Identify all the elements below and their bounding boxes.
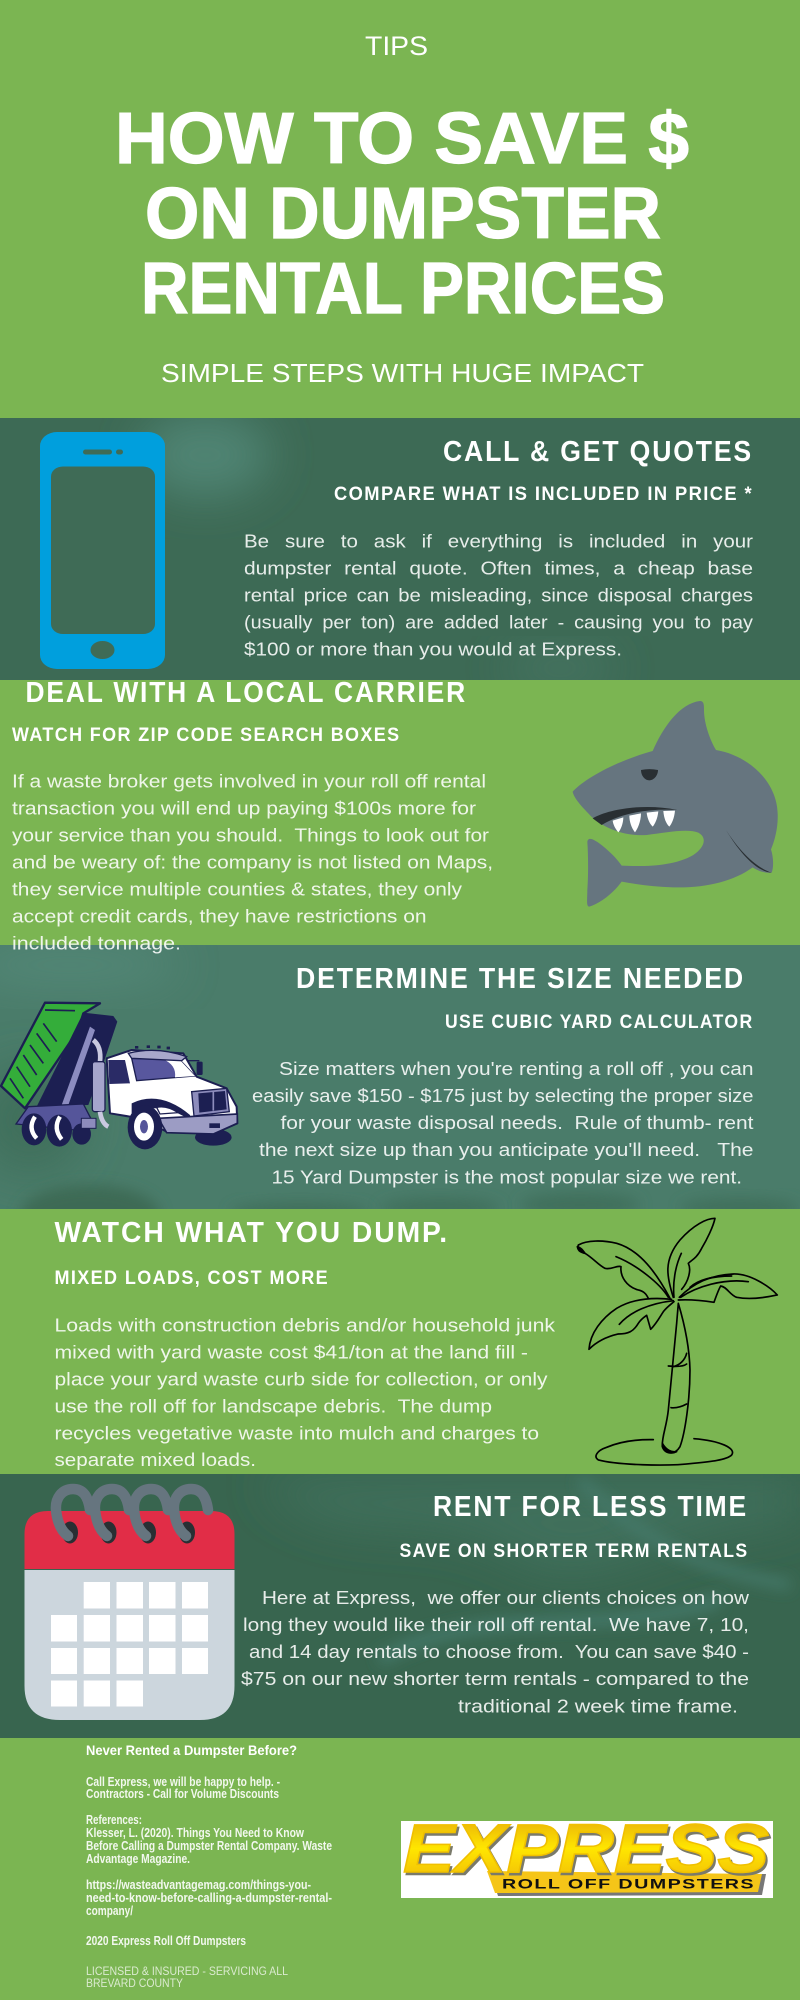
panel: call and get quotes — [0, 413, 800, 684]
heading: watch what you dump: WATCH WHAT YOU DUMP. — [54, 1217, 449, 1249]
references: https://wasteadvantagemag.com/things-you- — [86, 1878, 311, 1892]
subheading: cubic yard calculator: USE CUBIC YARD CALCULATOR — [445, 1011, 754, 1033]
license note — [86, 1966, 289, 1990]
title: ON DUMPSTER — [145, 174, 661, 254]
body text: rental length: $75 on our new shorter term rentals - compared to the — [241, 1669, 749, 1689]
icon: shark — [573, 701, 778, 907]
body text: mixed loads: mixed with yard waste cost $41/ton at the land fill - — [54, 1342, 528, 1362]
references — [86, 1813, 332, 1918]
panel: footer — [0, 1738, 800, 2000]
panel: watch what you dump — [0, 1209, 800, 1474]
tips label: TIPS — [365, 31, 428, 61]
body text: quotes — [244, 532, 753, 660]
icon: smartphone — [40, 432, 165, 669]
body text: mixed loads: separate mixed loads. — [54, 1450, 256, 1470]
body text: waste broker — [12, 772, 493, 954]
body text: mixed loads: use the roll off for landscape debris. The dump — [54, 1396, 492, 1416]
body text: rental length — [241, 1588, 750, 1716]
heading: determine the size: DETERMINE THE SIZE NEEDED — [296, 963, 745, 995]
body text: size: Size matters when you're renting a roll off , you can — [279, 1059, 754, 1079]
references: Before Calling a Dumpster Rental Company. Waste — [86, 1839, 332, 1853]
icon: roll off truck — [1, 1003, 237, 1149]
subheading: zip code search boxes: WATCH FOR ZIP CODE SEARCH BOXES — [12, 724, 400, 746]
license note: BREVARD COUNTY — [86, 1978, 183, 1990]
heading: deal with a local carrier: DEAL WITH A LOCAL CARRIER — [26, 677, 467, 709]
body text: size: the next size up than you anticipate you'll need. The — [259, 1140, 754, 1160]
references: need-to-know-before-calling-a-dumpster-rental- — [86, 1891, 332, 1905]
body text: size: for your waste disposal needs. Rule of thumb- rent — [280, 1113, 754, 1133]
body text: waste broker: accept credit cards, they have restrictions on — [12, 906, 426, 926]
panel: rent for less time — [0, 1474, 800, 1738]
body text: mixed loads: Loads with construction debris and/or household junk — [54, 1316, 556, 1336]
body text: quotes: (usually per ton) are added later - causing you to pay — [244, 612, 753, 632]
references: Advantage Magazine. — [86, 1852, 190, 1866]
title: RENTAL PRICES — [141, 249, 665, 329]
header — [115, 31, 689, 388]
subheading: mixed loads: MIXED LOADS, COST MORE — [54, 1267, 329, 1289]
logo: express roll off dumpsters: EXPRESS — [403, 1810, 769, 1887]
footer call to action: Call Express, we will be happy to help. - — [86, 1775, 280, 1789]
icon: palm tree — [577, 1218, 777, 1465]
title: HOW TO SAVE $ — [115, 99, 689, 179]
body text: mixed loads: recycles vegetative waste into mulch and charges to — [54, 1424, 539, 1444]
body text: size: easily save $150 - $175 just by selecting the proper size — [252, 1086, 754, 1106]
body text: waste broker: they service multiple counties & states, they only — [12, 880, 462, 900]
subtitle: SIMPLE STEPS WITH HUGE IMPACT — [161, 358, 644, 388]
body text: waste broker: included tonnage. — [12, 934, 181, 954]
body text: waste broker: your service than you should. Things to look out for — [12, 826, 489, 846]
footer call to action — [86, 1775, 280, 1801]
panel: deal with a local carrier — [0, 677, 800, 954]
body text: waste broker: transaction you will end up paying $100s more for — [12, 798, 476, 818]
body text: rental length: traditional 2 week time frame. — [458, 1696, 738, 1716]
footer call to action: Contractors - Call for Volume Discounts — [86, 1787, 279, 1801]
body text: quotes: dumpster rental quote. Often times, a cheap base — [244, 558, 753, 578]
body text: waste broker: If a waste broker gets involved in your roll off rental — [12, 772, 486, 792]
logo: express roll off dumpsters: EXPRESS — [405, 1812, 771, 1890]
body text: waste broker: and be weary of: the company is not listed on Maps, — [12, 852, 493, 872]
references: Klesser, L. (2020). Things You Need to Know — [86, 1826, 304, 1840]
body text: quotes: Be sure to ask if everything is included in your — [244, 532, 753, 552]
body text: rental length: and 14 day rentals to choose from. You can save $40 - — [249, 1642, 749, 1662]
body text: quotes: rental price can be misleading, since disposal charges — [244, 586, 753, 606]
body text: rental length: Here at Express, we offer our clients choices on how — [262, 1588, 750, 1608]
body text: mixed loads: place your yard waste curb side for collection, or only — [54, 1370, 548, 1390]
body text: quotes: $100 or more than you would at Express. — [244, 640, 622, 660]
license note: LICENSED & INSURED - SERVICING ALL — [86, 1966, 289, 1978]
references: company/ — [86, 1904, 133, 1918]
body text: size: 15 Yard Dumpster is the most popular size we rent. — [272, 1168, 742, 1188]
heading: call and get quotes: CALL & GET QUOTES — [443, 436, 753, 468]
subheading: compare what is included: COMPARE WHAT IS INCLUDED IN PRICE * — [334, 483, 753, 505]
logo: express roll off dumpsters: ROLL OFF DUMPSTERS — [502, 1876, 755, 1892]
body text: size — [252, 1059, 754, 1188]
body text: rental length: long they would like their roll off rental. We have 7, 10, — [243, 1615, 749, 1635]
panel: determine the size needed — [0, 945, 800, 1209]
body text: mixed loads — [54, 1316, 556, 1470]
subheading: shorter term rentals: SAVE ON SHORTER TERM RENTALS — [400, 1540, 748, 1562]
heading: rent for less time: RENT FOR LESS TIME — [433, 1491, 748, 1523]
title — [115, 99, 689, 329]
copyright: 2020 Express Roll Off Dumpsters — [86, 1934, 246, 1948]
references: References: — [86, 1813, 142, 1827]
icon: calendar — [24, 1489, 234, 1720]
footer heading: Never Rented a Dumpster Before? — [86, 1742, 297, 1758]
